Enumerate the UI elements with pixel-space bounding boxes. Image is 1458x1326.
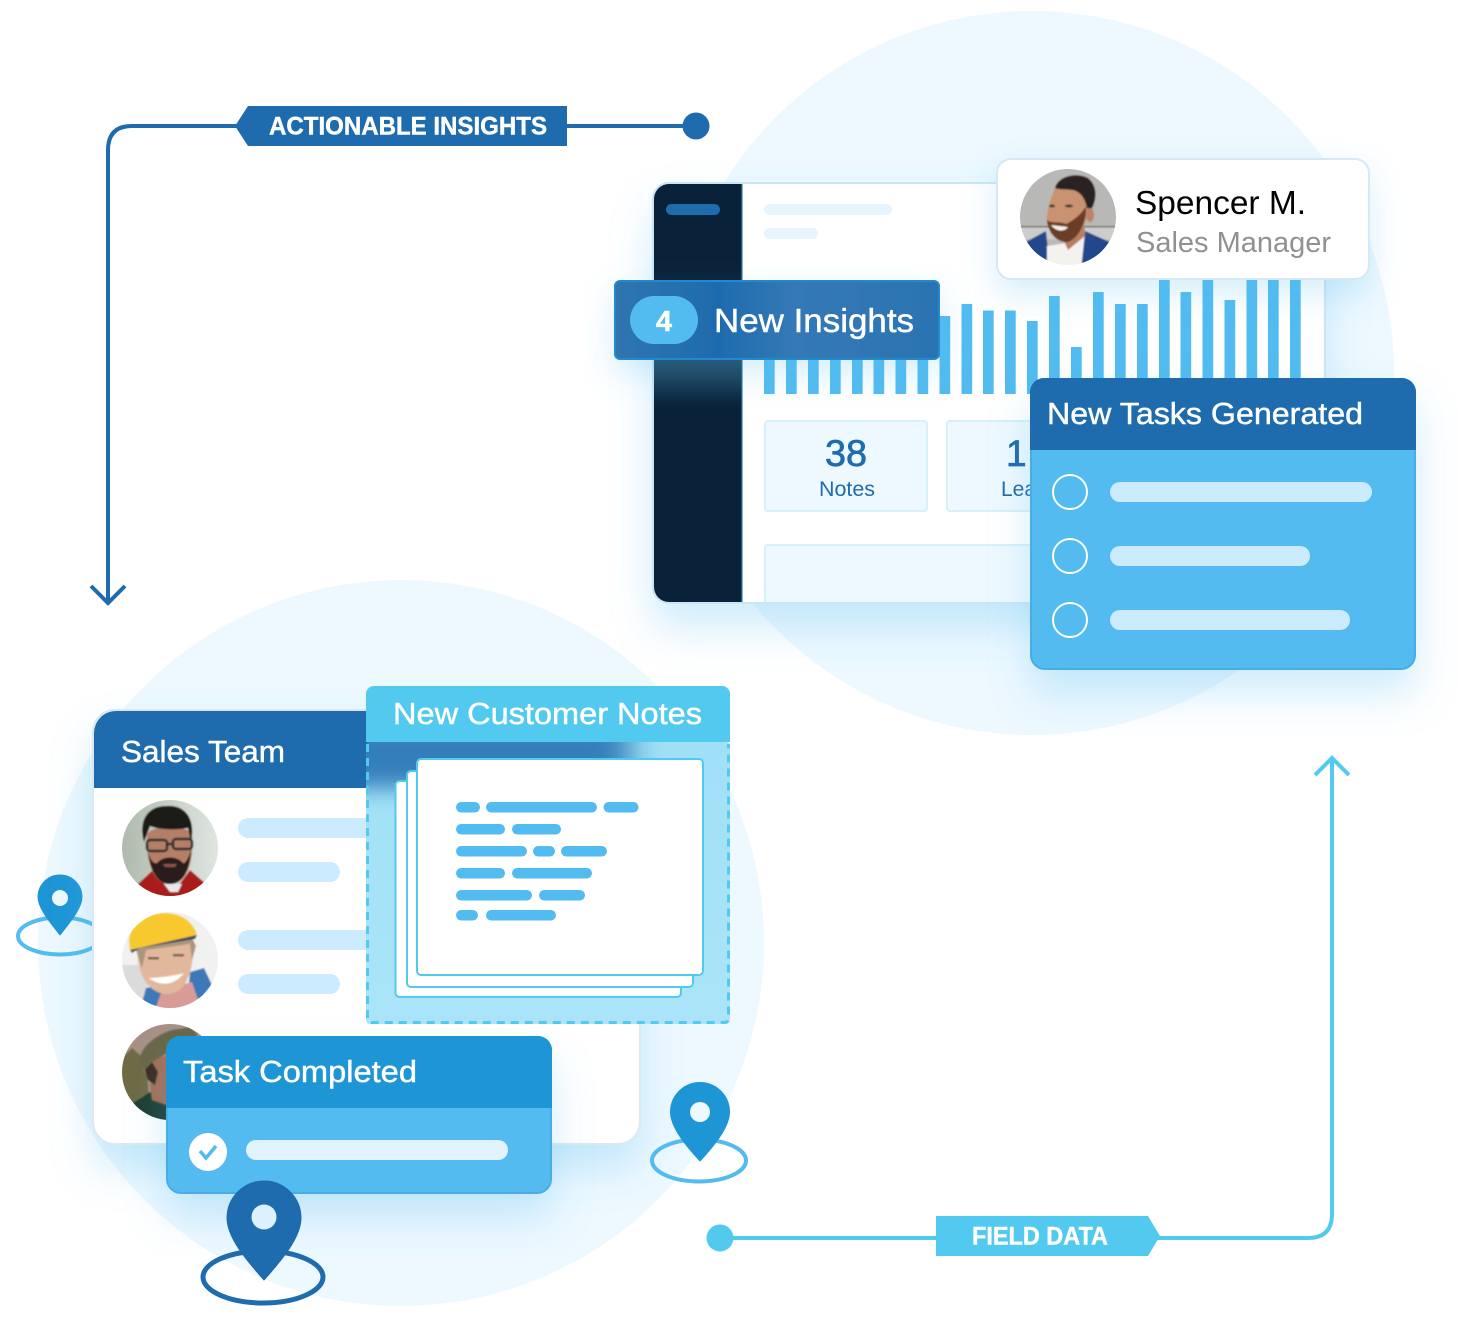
background circle: top right — [670, 11, 1394, 735]
panel: new tasks generated — [1030, 378, 1416, 669]
badge — [630, 296, 698, 344]
placeholder panel — [764, 544, 1030, 602]
name: Spencer M. — [1135, 184, 1306, 221]
avatar: worker in hard hat — [120, 910, 220, 1010]
role: Sales Manager — [1136, 227, 1331, 259]
card: Spencer M. — [997, 159, 1369, 279]
panel: task completed — [166, 1036, 552, 1193]
banner: new insights — [615, 281, 939, 359]
dashboard sidebar — [654, 184, 742, 602]
stat: leads — [946, 420, 1030, 512]
task rows — [1053, 475, 1372, 637]
heading: New Tasks Generated — [1047, 396, 1363, 431]
arrow: field data: FIELD DATA — [972, 1222, 1108, 1250]
heading: Sales Team — [121, 734, 285, 769]
bar chart — [764, 278, 1301, 394]
dashboard heading placeholders — [764, 204, 892, 239]
heading: New Customer Notes — [393, 696, 702, 731]
map pin: left — [18, 875, 102, 954]
panel: sales team — [93, 710, 640, 1144]
stat: notes: 38 — [825, 433, 867, 474]
icon: check — [189, 1133, 227, 1171]
background circle: bottom left — [38, 580, 764, 1306]
stat: notes — [765, 421, 927, 511]
badge: 4 — [656, 306, 672, 338]
heading: Task Completed — [183, 1054, 417, 1089]
list placeholders — [238, 818, 398, 994]
map pin: right — [652, 1082, 746, 1182]
arrow: actionable insights: ACTIONABLE INSIGHTS — [269, 112, 547, 140]
avatar: man with glasses — [120, 798, 220, 900]
completed task placeholder — [246, 1140, 508, 1160]
map pin: bottom — [203, 1181, 323, 1303]
panel: dashboard — [653, 183, 1325, 615]
stat: notes: Notes — [819, 478, 875, 501]
banner label: New Insights — [714, 302, 914, 339]
panel: new customer notes — [330, 686, 730, 1024]
arrow: field data — [706, 758, 1349, 1256]
arrow: actionable insights — [91, 106, 710, 603]
note text lines — [456, 802, 638, 920]
stat: leads: 14 — [1006, 433, 1054, 474]
avatar: man in cap — [122, 1024, 202, 1120]
stacked note pages — [396, 759, 703, 997]
stat: leads: Leads — [1001, 478, 1058, 501]
avatar: Spencer — [1020, 169, 1116, 265]
